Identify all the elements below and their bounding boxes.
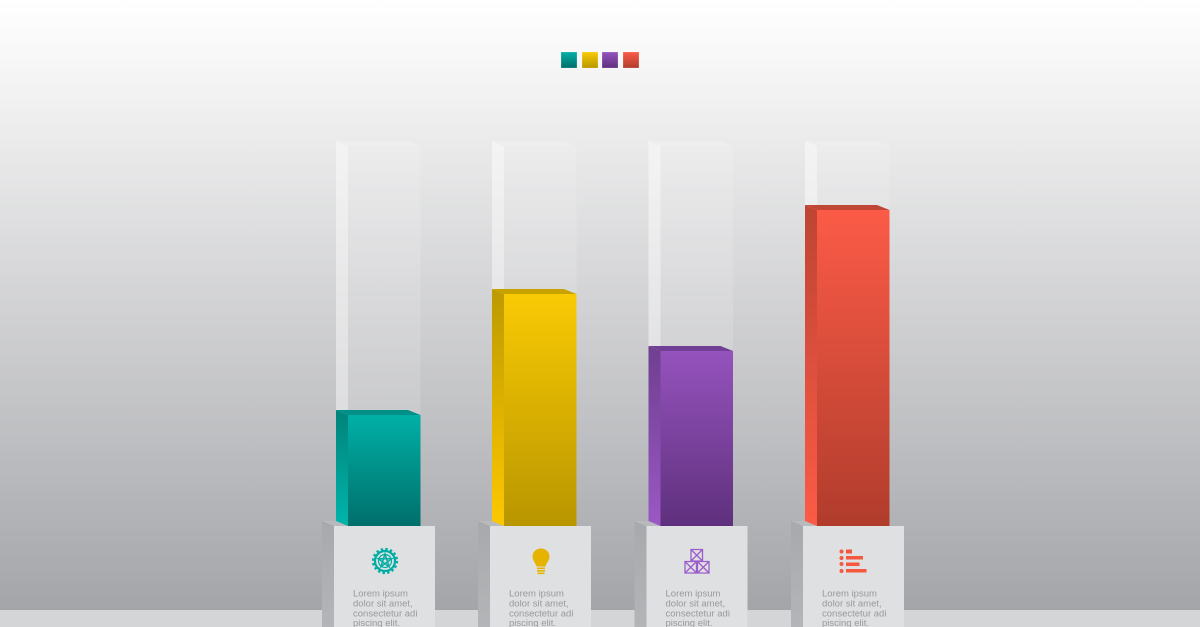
column 4: red [791, 141, 904, 627]
floor [0, 610, 1200, 627]
icon: gear [373, 549, 397, 573]
legend swatch: purple [602, 52, 618, 68]
label text: dolor sit amet, [509, 598, 569, 610]
label text: consectetur adi [822, 608, 886, 619]
plinth [478, 521, 591, 627]
column 2: yellow [478, 141, 591, 627]
glass tube [805, 141, 890, 526]
label text: consectetur adi [666, 608, 730, 619]
icon: list [840, 550, 866, 573]
glass tube [648, 141, 733, 526]
label text: Lorem ipsum [509, 588, 564, 600]
label text: consectetur adi [509, 608, 573, 619]
legend swatch: red [623, 52, 639, 68]
label text: Lorem ipsum [666, 588, 720, 600]
bar [492, 289, 576, 526]
icon: stacked crates [685, 550, 709, 573]
label text: dolor sit amet, [353, 598, 413, 610]
label text: Lorem ipsum [353, 588, 408, 600]
bar [648, 346, 733, 526]
plinth [791, 521, 904, 627]
label text: dolor sit amet, [822, 598, 882, 610]
label text: consectetur adi [353, 608, 417, 619]
plinth [322, 521, 435, 627]
glass tube [492, 141, 576, 526]
legend swatch: teal [561, 52, 577, 68]
label text: Lorem ipsum [822, 588, 877, 600]
column 1: teal [322, 141, 435, 627]
label text: dolor sit amet, [666, 598, 725, 610]
bar [336, 410, 420, 526]
glass tube [336, 141, 420, 526]
legend swatch: yellow [582, 52, 598, 68]
bar [805, 205, 890, 526]
column 3: purple [634, 141, 748, 627]
icon: light bulb [532, 548, 550, 574]
plinth [634, 521, 748, 627]
legend [561, 52, 639, 68]
